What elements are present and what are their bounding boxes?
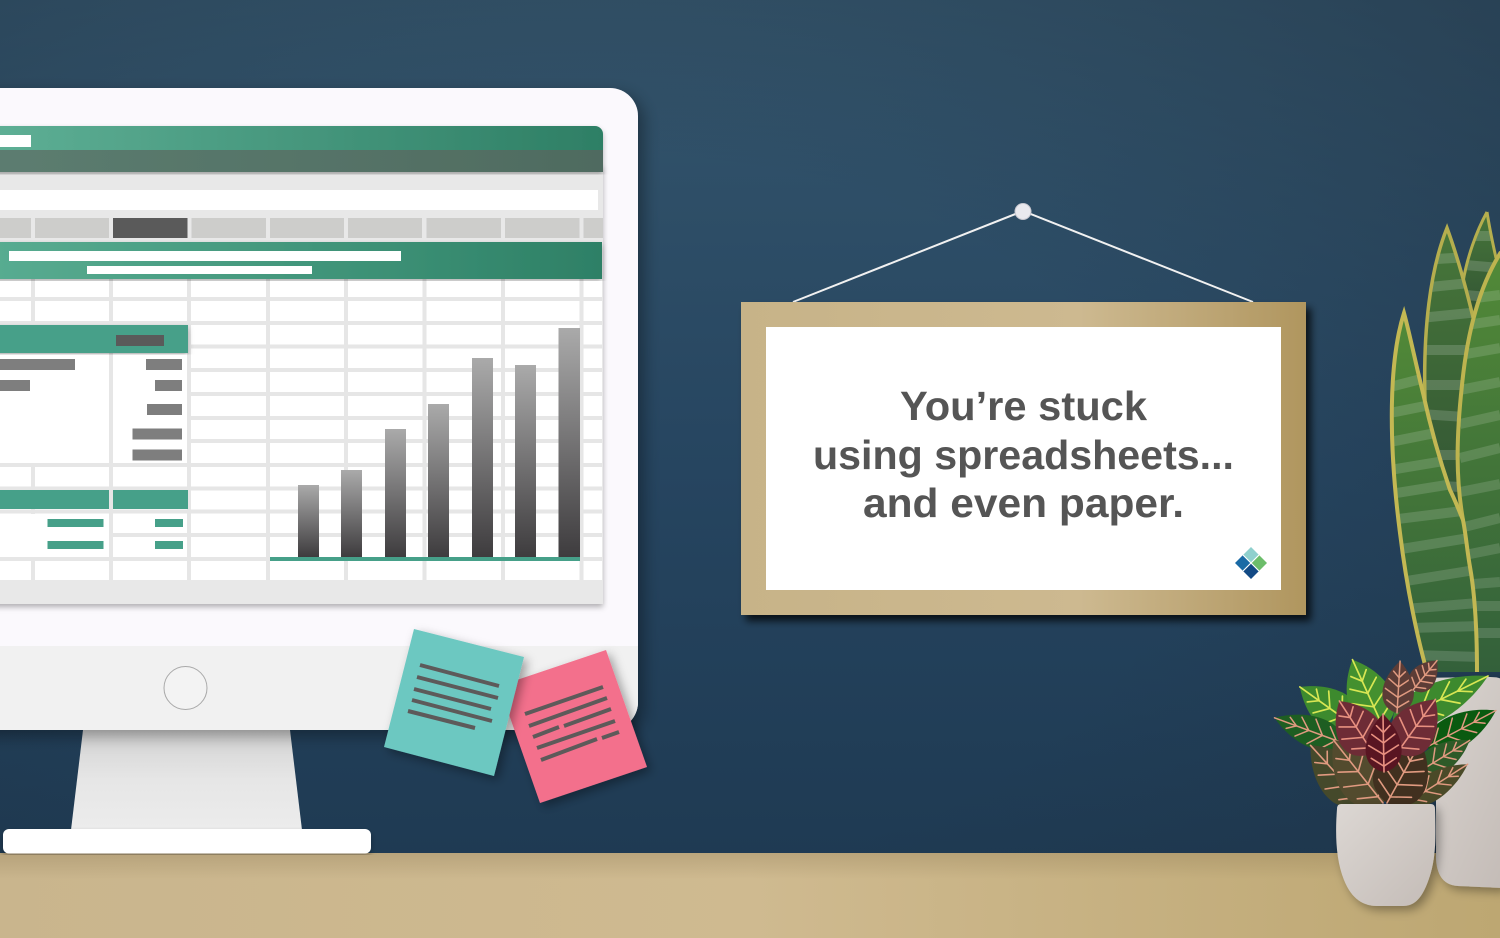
leaf: top maroon bbox=[1381, 652, 1447, 714]
table one header bbox=[0, 325, 188, 353]
plant pot bbox=[1336, 804, 1435, 906]
table one rows bbox=[0, 359, 182, 460]
monitor body bbox=[0, 88, 638, 730]
leaf: dark green bbox=[1269, 696, 1500, 814]
pink note lines bbox=[525, 687, 619, 760]
monitor button bbox=[164, 666, 207, 710]
desk surface bbox=[0, 853, 1500, 938]
sticky note: teal bbox=[384, 629, 524, 776]
teal note lines bbox=[408, 665, 499, 728]
title bar label bbox=[0, 135, 31, 147]
window body bbox=[0, 165, 603, 604]
heading lines bbox=[9, 251, 401, 274]
croton plant bbox=[1269, 650, 1500, 819]
back vase bbox=[1410, 677, 1500, 888]
back leaf bbox=[1463, 211, 1497, 311]
cell grid bbox=[0, 279, 602, 580]
computer monitor bbox=[0, 88, 638, 854]
table two bbox=[0, 490, 188, 549]
message text: using spreadsheets... bbox=[813, 432, 1234, 478]
picture frame bbox=[741, 302, 1306, 615]
bar chart bbox=[270, 328, 580, 561]
logo bbox=[1235, 547, 1267, 579]
hanging string bbox=[793, 211, 1253, 302]
sticky note: pink bbox=[499, 650, 647, 803]
column tabs bbox=[0, 218, 603, 238]
sheet heading band bbox=[0, 242, 602, 279]
formula bar bbox=[0, 190, 598, 210]
spreadsheet window bbox=[0, 126, 603, 604]
picture canvas bbox=[766, 327, 1281, 590]
monitor stand bbox=[71, 730, 302, 830]
nail bbox=[1015, 204, 1031, 220]
message text: and even paper. bbox=[863, 480, 1184, 526]
leaf: bright green bbox=[1288, 650, 1496, 747]
message text: You’re stuck bbox=[900, 383, 1147, 429]
table one header label bbox=[116, 335, 164, 346]
middle leaf bbox=[1422, 223, 1474, 504]
hanging picture bbox=[741, 204, 1306, 615]
leaf: red bbox=[1320, 686, 1454, 772]
monitor base bbox=[3, 829, 371, 854]
leaf: olive brown bbox=[1294, 724, 1444, 819]
table one bbox=[0, 325, 188, 460]
window title bar bbox=[0, 126, 603, 172]
front leaf bbox=[1390, 313, 1480, 672]
snake plant bbox=[1390, 212, 1500, 672]
right leaf bbox=[1458, 252, 1500, 672]
